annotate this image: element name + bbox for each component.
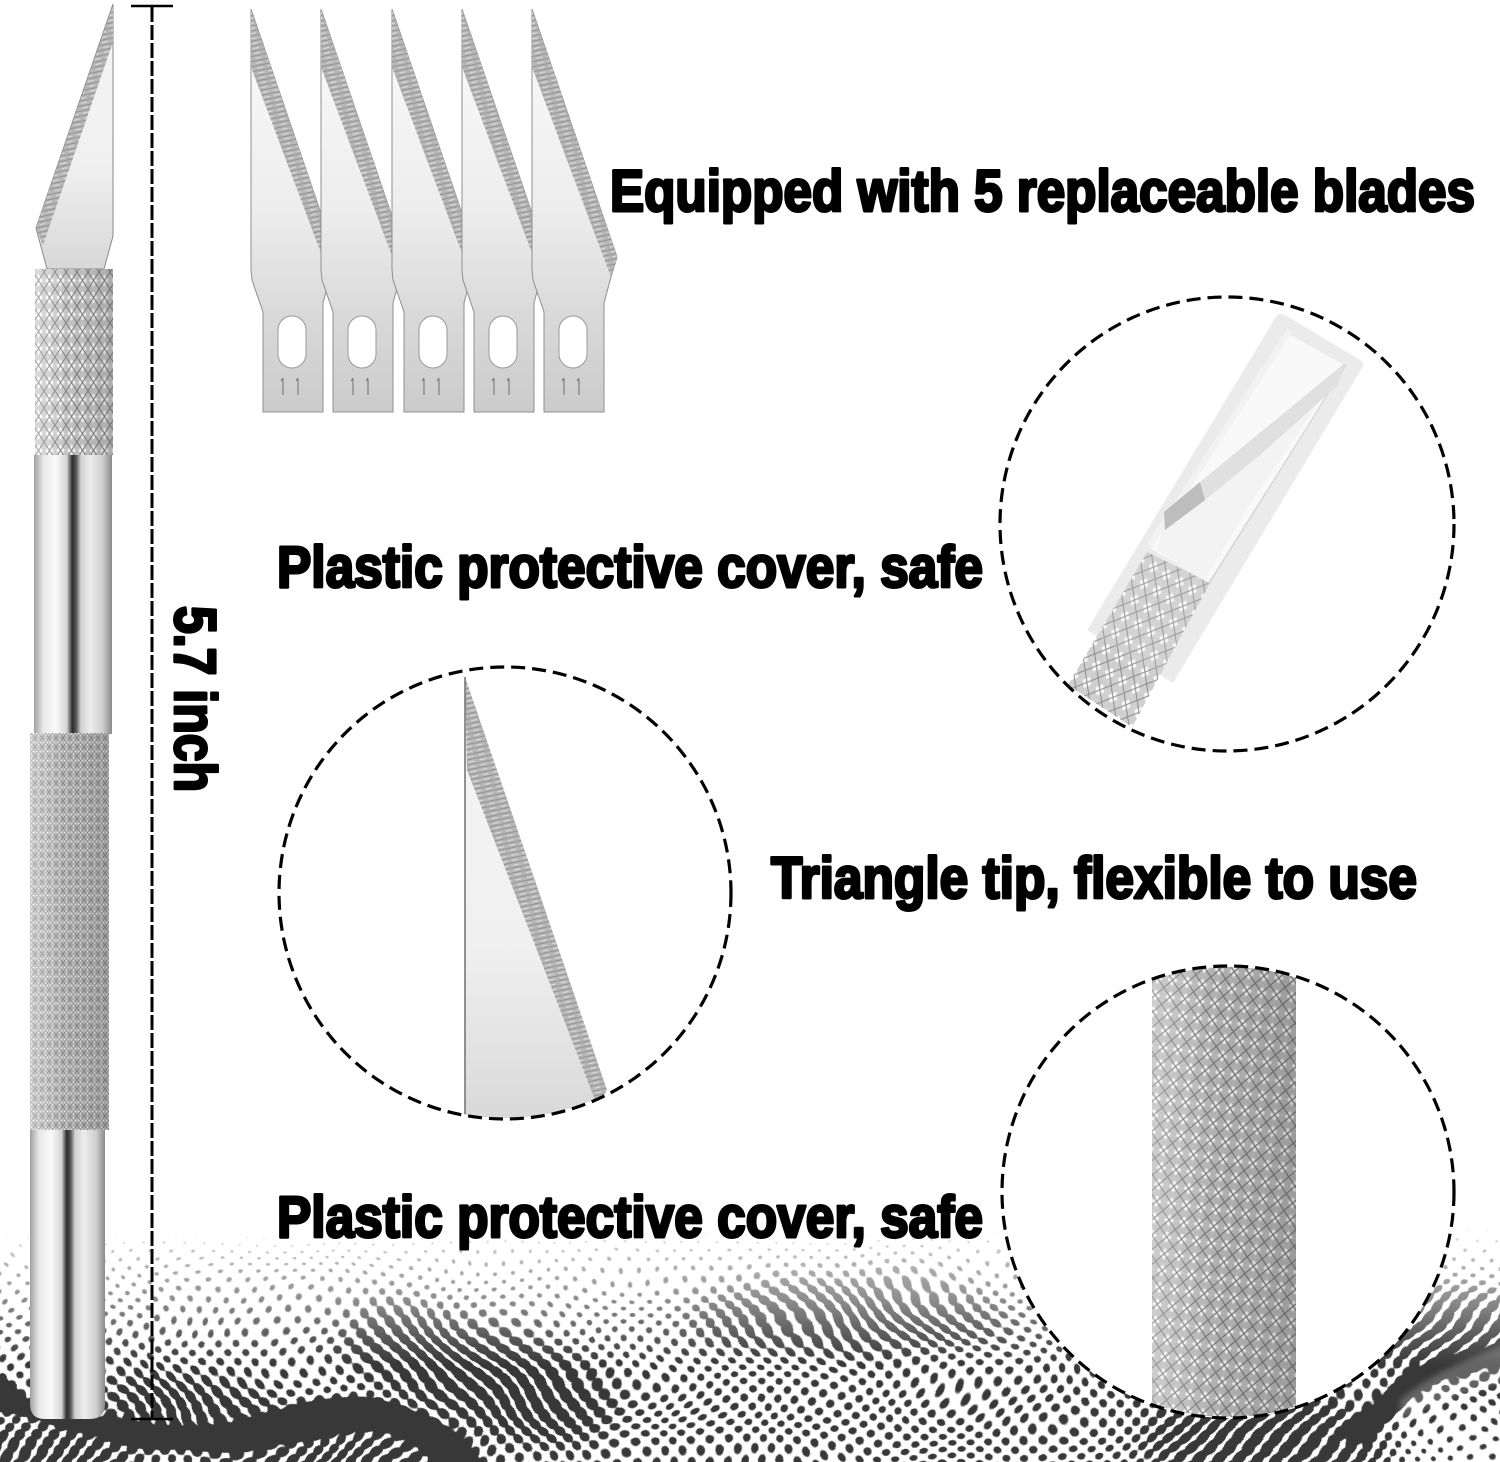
blade 2 <box>321 9 406 412</box>
label: triangle tip: Triangle tip, flexible to use <box>771 846 1417 911</box>
enlarged knurled handle <box>1152 960 1296 1425</box>
label: plastic cover: Plastic protective cover, safe <box>277 535 983 600</box>
detail circle: triangle tip <box>279 667 731 1125</box>
blade 4 <box>462 9 547 412</box>
halftone wave background <box>0 1230 1500 1462</box>
blade 3 <box>392 9 477 412</box>
knurled collar <box>35 269 113 455</box>
knife blade <box>36 4 113 269</box>
label: knurled grip: Plastic protective cover, safe <box>277 1185 983 1250</box>
dimension line <box>131 6 173 1419</box>
blade 5 <box>532 9 617 412</box>
knurled grip <box>30 733 109 1130</box>
plastic cover <box>1068 314 1363 727</box>
enlarged blade tip <box>466 740 607 1118</box>
knurled handle under cover <box>1068 636 1158 726</box>
knife: full craft knife with handle <box>30 4 113 1419</box>
chrome shaft lower <box>30 1130 105 1419</box>
blade bevel <box>465 677 607 1105</box>
blade inside cover <box>1157 362 1346 581</box>
five replacement blades <box>251 9 617 412</box>
blade 1 <box>251 9 336 412</box>
dimension label: 5.7 inch <box>162 606 227 792</box>
detail circle: protective cover <box>1000 297 1454 751</box>
detail circle: knurled grip <box>1002 960 1454 1425</box>
chrome shaft upper <box>34 455 112 734</box>
